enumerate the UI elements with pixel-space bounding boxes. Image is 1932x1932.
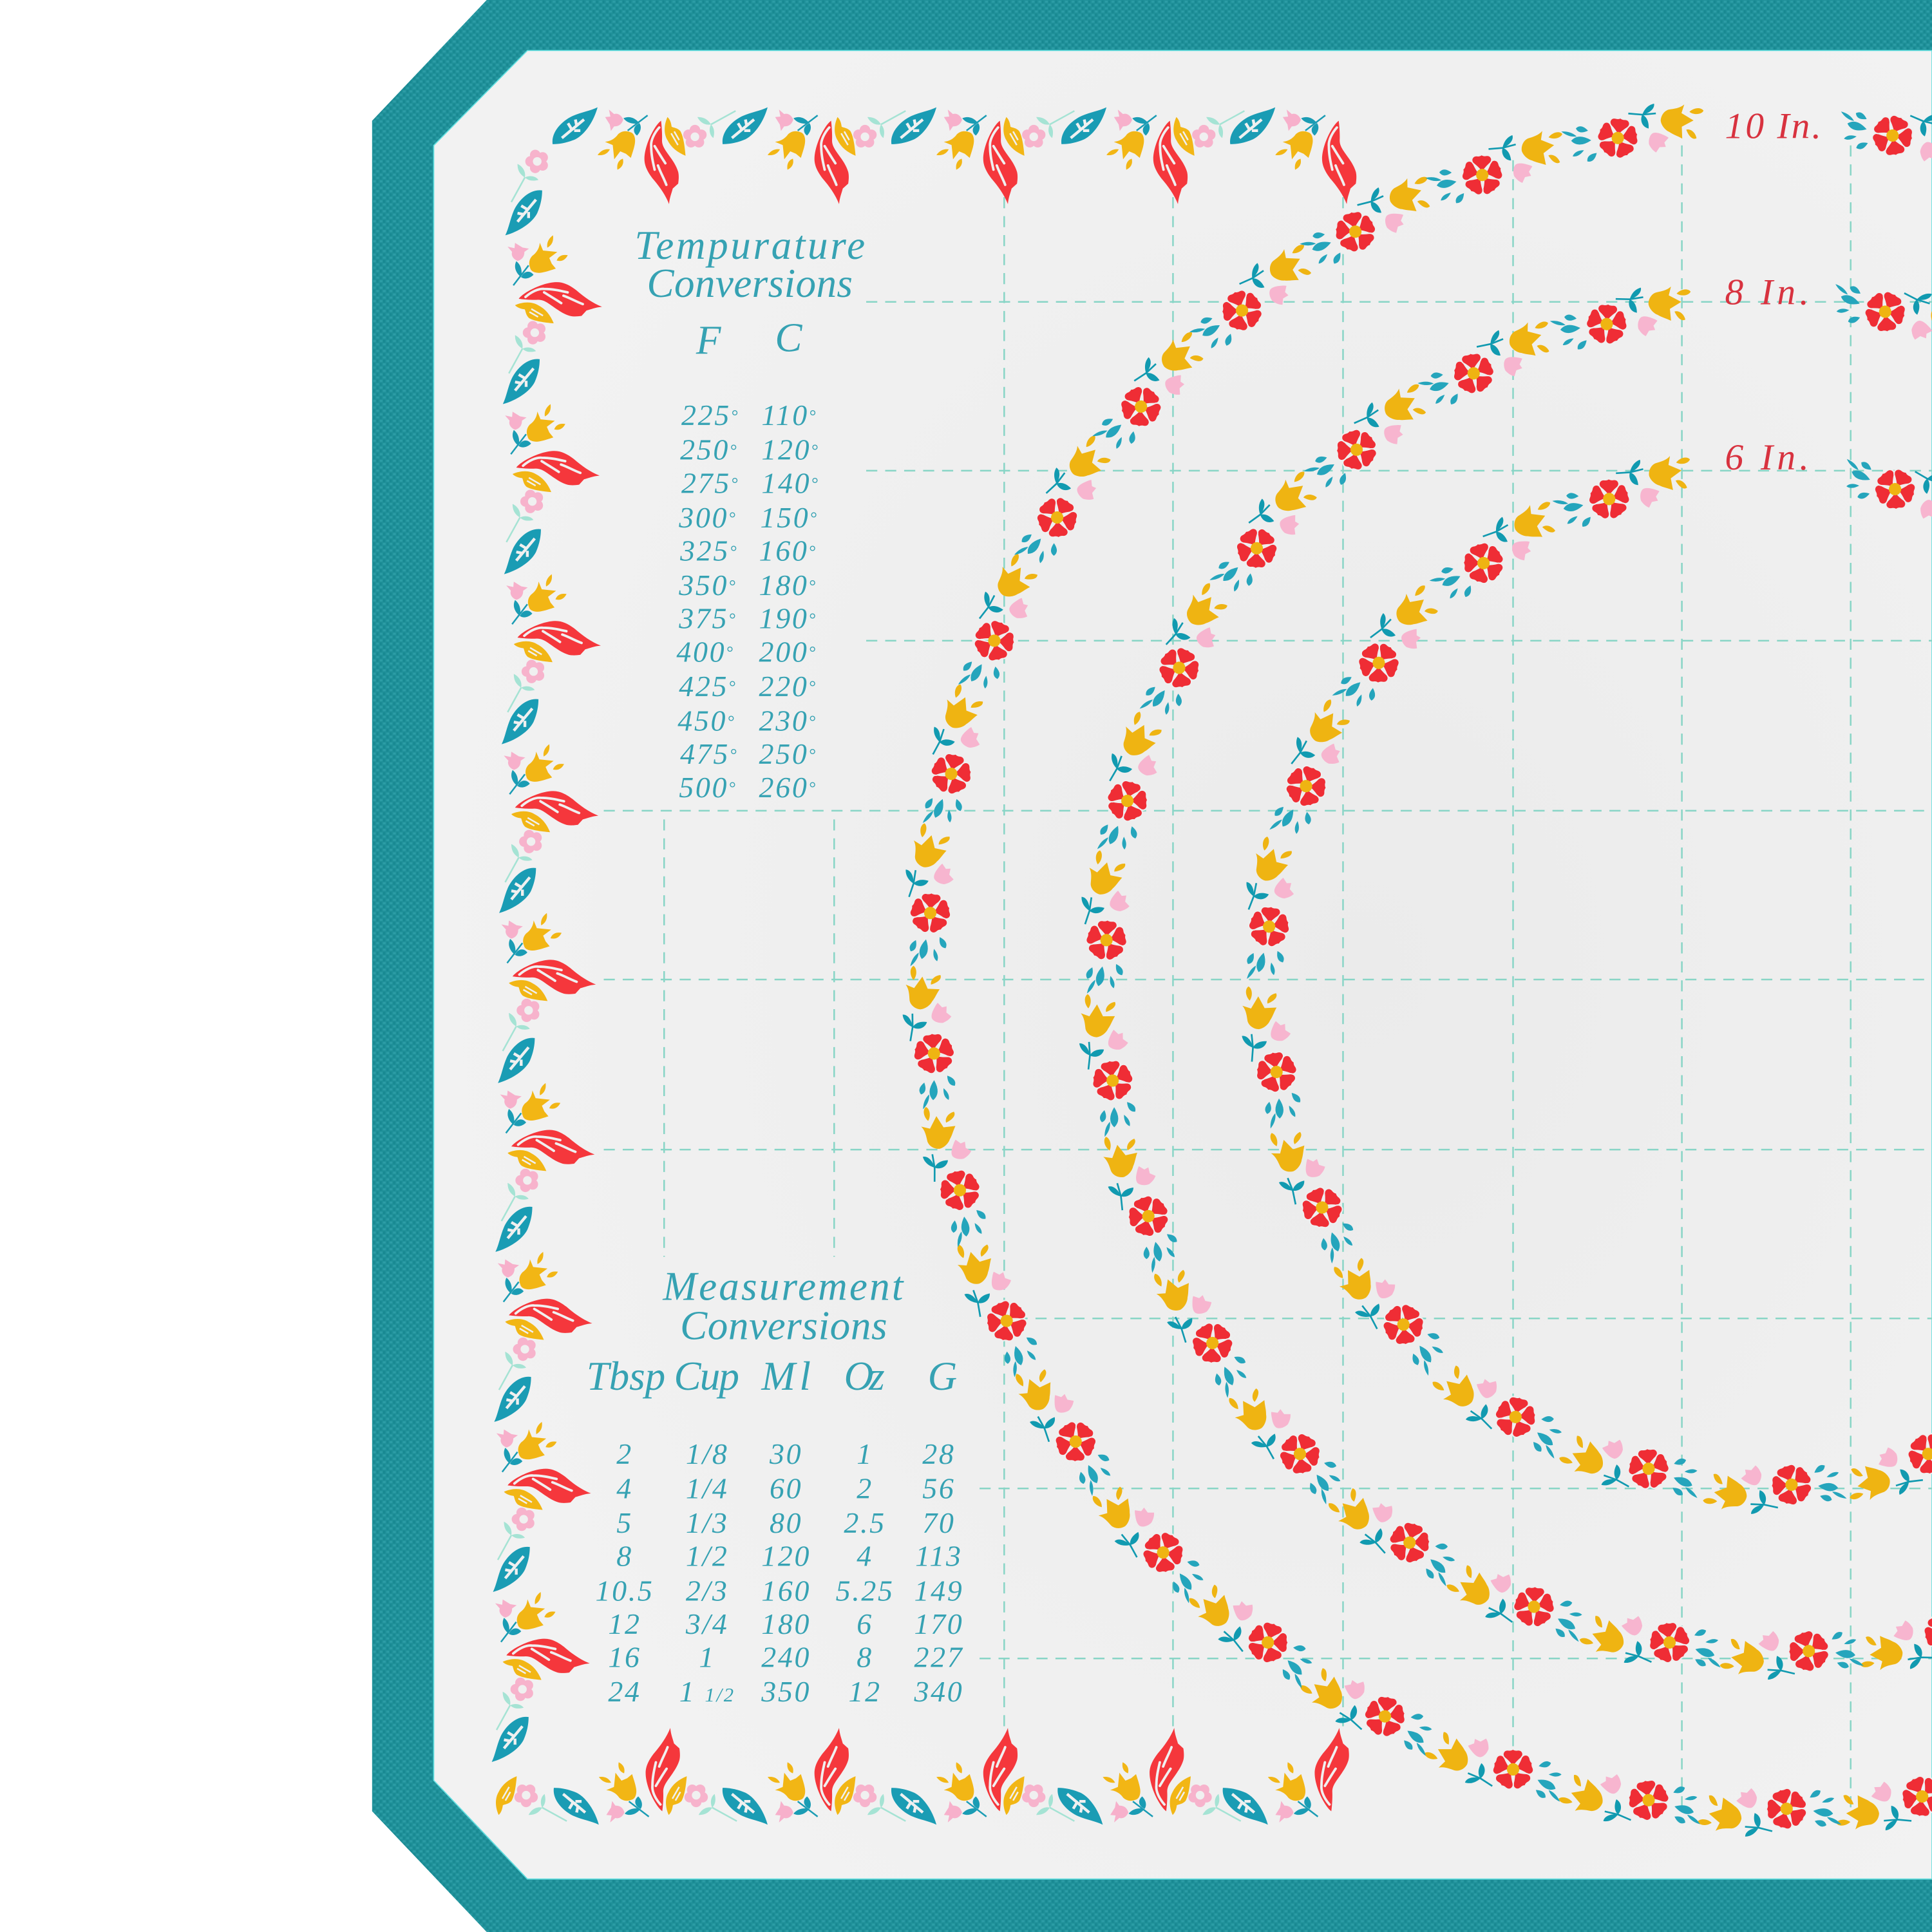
cup column: 1/3 [686,1506,729,1539]
heading: measurement conversions: Measurement [662,1264,904,1309]
tablespoon column: 4 [616,1472,633,1505]
heading: temperature conversions [634,223,865,306]
gram column: 340 [913,1675,963,1708]
heading: temperature conversions: Conversions [647,261,853,306]
gram column: 113 [915,1540,963,1573]
fahrenheit values: 500 [679,771,728,804]
floral border: left [492,149,602,1762]
6 inch floral ring [1233,444,1932,1517]
fahrenheit values: 425 [679,670,728,703]
column headers F and C: C [775,315,802,360]
ring size labels: 6 In. [1725,437,1809,478]
column headers: Cup [674,1354,739,1399]
millilitre column [761,1437,811,1708]
tablespoon column [595,1437,654,1708]
celsius values: ° [811,440,820,460]
measurement conversions table [587,1264,963,1708]
tablespoon column: 2 [616,1437,633,1470]
fahrenheit values: 225 [681,399,731,431]
ounce column: 8 [857,1641,873,1674]
ounce column: 4 [857,1540,873,1573]
ounce column: 6 [857,1607,873,1640]
ounce column: 2 [857,1472,873,1505]
celsius values: ° [808,744,817,764]
gram column: 70 [922,1506,956,1539]
fahrenheit values: ° [730,440,738,460]
cup column: 1 1/2 [679,1675,735,1708]
tablespoon column: 10.5 [595,1574,654,1607]
fahrenheit values: 250 [680,433,730,466]
ounce column [836,1437,895,1708]
celsius values: ° [808,712,817,731]
celsius values: 150 [760,501,810,534]
celsius values: ° [808,677,817,696]
heading: temperature conversions: Tempurature [634,223,865,268]
fahrenheit values: 275 [681,466,731,499]
fahrenheit values: 450 [677,705,727,737]
cup column: 3/4 [685,1607,729,1640]
ring size labels [1725,106,1821,478]
millilitre column: 180 [761,1607,811,1640]
column headers F and C: F [696,317,722,363]
floral border: top [553,108,1356,204]
tablespoon column: 8 [616,1540,633,1573]
10 inch floral ring [898,95,1932,1839]
celsius values: 230 [759,705,808,737]
cup column: 1/8 [686,1437,729,1470]
8 inch floral ring [1072,274,1932,1681]
celsius values: ° [808,542,817,561]
celsius values: 160 [759,535,808,567]
dashed measurement grid [604,146,1932,1811]
fahrenheit values: ° [728,778,737,797]
cup column: 1/4 [686,1472,729,1505]
column headers: Oz [844,1354,885,1399]
gram column: 56 [922,1472,956,1505]
celsius values: ° [809,406,817,425]
ounce column: 1 [857,1437,873,1470]
millilitre column: 350 [761,1675,811,1708]
ounce column: 2.5 [844,1506,886,1539]
ounce column: 12 [848,1675,882,1708]
celsius values: 110 [761,399,809,431]
column headers [587,1354,957,1399]
floral border: bottom [496,1728,1349,1824]
celsius values: ° [810,508,819,527]
tablespoon column: 16 [608,1641,641,1674]
celsius values: ° [808,643,817,662]
celsius values: ° [811,474,820,493]
fahrenheit values: ° [728,508,737,527]
celsius values: 120 [761,433,811,466]
column headers F and C [696,315,802,363]
column headers: Tbsp [587,1354,665,1399]
celsius values: 260 [759,771,808,804]
fahrenheit values: ° [730,542,738,561]
cup column: 1/2 [686,1540,729,1573]
millilitre column: 160 [761,1574,811,1607]
fahrenheit values: ° [731,474,739,493]
heading: measurement conversions [662,1264,904,1349]
column headers: Ml [761,1354,811,1399]
celsius values: 180 [759,569,808,601]
tablespoon column: 24 [608,1675,641,1708]
fahrenheit values: 475 [680,737,730,770]
heading: measurement conversions: Conversions [680,1303,887,1349]
fahrenheit values: 325 [680,535,730,567]
column headers: G [928,1354,957,1399]
ounce column: 5.25 [836,1574,895,1607]
celsius values: 250 [759,737,808,770]
fahrenheit values: 350 [679,569,728,601]
fahrenheit values: ° [730,744,738,764]
celsius values [759,399,820,804]
fahrenheit values: ° [728,576,737,595]
tablespoon column: 12 [608,1607,641,1640]
millilitre column: 30 [769,1437,802,1470]
tablespoon column: 5 [616,1506,633,1539]
mat paper surface [433,50,1932,1879]
gram column: 149 [914,1574,963,1607]
fahrenheit values: 400 [676,635,726,668]
fahrenheit values: ° [731,406,739,425]
millilitre column: 80 [770,1506,802,1539]
gram column [913,1437,963,1708]
gram column: 227 [914,1641,963,1674]
fahrenheit values: ° [728,677,737,696]
celsius values: 200 [759,635,808,668]
celsius values: ° [808,778,817,797]
gram column: 170 [914,1607,963,1640]
cup column: 1 [699,1641,715,1674]
ring size labels: 10 In. [1725,106,1821,146]
gram column: 28 [922,1437,956,1470]
celsius values: 190 [759,602,808,635]
millilitre column: 120 [761,1540,811,1573]
fahrenheit values: ° [726,643,735,662]
temperature conversions table [634,223,865,804]
millilitre column: 240 [761,1641,811,1674]
cup column [679,1437,735,1708]
fahrenheit values: 375 [679,602,728,635]
millilitre column: 60 [770,1472,802,1505]
fahrenheit values [676,399,739,804]
cup column: 2/3 [686,1574,729,1607]
fahrenheit values: ° [728,609,737,629]
fahrenheit values: ° [727,712,736,731]
fahrenheit values: 300 [679,501,728,534]
celsius values: ° [808,576,817,595]
ring size labels: 8 In. [1725,272,1809,313]
celsius values: 220 [759,670,808,703]
celsius values: ° [808,609,817,629]
celsius values: 140 [761,466,811,499]
